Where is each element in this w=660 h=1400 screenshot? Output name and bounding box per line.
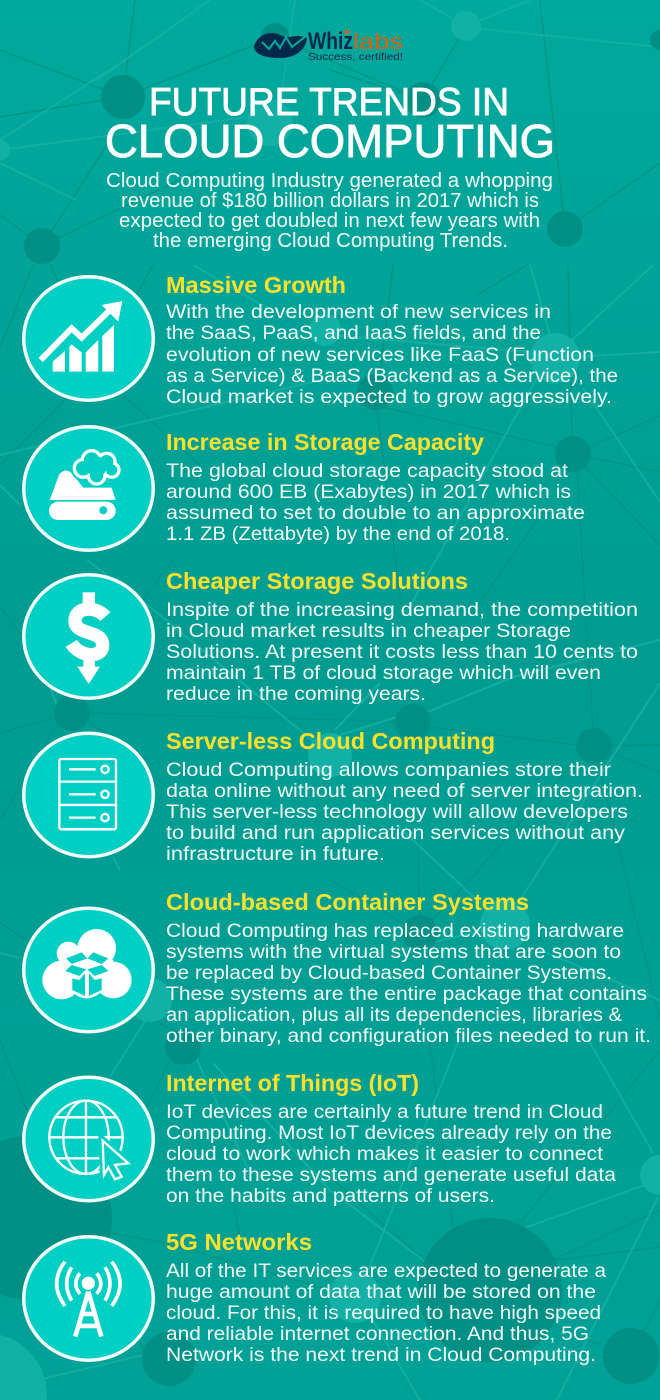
text block: data online without any need of server integration. bbox=[166, 780, 643, 802]
heading: 5G Networks bbox=[166, 1229, 312, 1255]
text block: in Cloud market results in cheaper Storage bbox=[166, 620, 571, 642]
logo mark bbox=[254, 33, 307, 58]
text block bbox=[166, 759, 643, 865]
text block: Solutions. At present it costs less than 10 cents to bbox=[166, 641, 638, 663]
text block: IoT devices are certainly a future trend in Cloud bbox=[166, 1101, 603, 1123]
intro text: Cloud Computing Industry generated a whopping bbox=[106, 170, 553, 192]
text block: other binary, and configuration files needed to run it. bbox=[166, 1025, 651, 1047]
text block: infrastructure in future. bbox=[166, 843, 385, 865]
text block: cloud to work which makes it easier to connect bbox=[166, 1143, 604, 1165]
heading: Cloud-based Container Systems bbox=[166, 889, 529, 915]
text block: All of the IT services are expected to generate a bbox=[166, 1260, 606, 1282]
heading: Massive Growth bbox=[166, 272, 346, 298]
title: CLOUD COMPUTING bbox=[105, 115, 555, 167]
icon: cloud storage drive bbox=[24, 427, 153, 550]
text block: the SaaS, PaaS, and IaaS fields, and the bbox=[166, 322, 541, 344]
text block: be replaced by Cloud-based Container Systems. bbox=[166, 962, 612, 984]
text block: around 600 EB (Exabytes) in 2017 which is bbox=[166, 481, 571, 503]
icon: cloud with box bbox=[24, 908, 153, 1032]
text block: assumed to set to double to an approximate bbox=[166, 502, 585, 524]
text block: an application, plus all its dependencies, libraries & bbox=[166, 1004, 622, 1026]
text block bbox=[166, 460, 585, 545]
text block bbox=[166, 301, 618, 408]
logo tagline: Success, certified! bbox=[308, 51, 403, 63]
text block: Cloud Computing allows companies store their bbox=[166, 759, 612, 781]
text block: and reliable internet connection. And thus, 5G bbox=[166, 1323, 589, 1345]
text block bbox=[166, 599, 638, 705]
text block: reduce in the coming years. bbox=[166, 683, 426, 705]
icon: globe with cursor bbox=[24, 1077, 153, 1201]
text block bbox=[166, 1101, 616, 1207]
icon: growth chart bbox=[24, 277, 153, 400]
text block: Cloud market is expected to grow aggressively. bbox=[166, 386, 612, 408]
heading: Internet of Things (IoT) bbox=[166, 1070, 419, 1096]
text block: With the development of new services in bbox=[166, 301, 551, 323]
text block: The global cloud storage capacity stood at bbox=[166, 460, 569, 482]
text block: Network is the next trend in Cloud Computing. bbox=[166, 1344, 596, 1366]
logo: Whizlabs bbox=[254, 28, 403, 63]
text block: systems with the virtual systems that are soon to bbox=[166, 941, 621, 963]
text block: This server-less technology will allow developers bbox=[166, 801, 628, 823]
panel: cheaper storage bbox=[24, 568, 638, 705]
title bbox=[105, 81, 555, 167]
text block: These systems are the entire package that contains bbox=[166, 983, 647, 1005]
text block: as a Service) & BaaS (Backend as a Service), the bbox=[166, 365, 618, 387]
panel: server-less bbox=[24, 728, 643, 865]
text block: to build and run application services without any bbox=[166, 822, 625, 844]
logo wordmark suffix: labs bbox=[353, 29, 403, 54]
heading: Increase in Storage Capacity bbox=[166, 429, 484, 455]
intro text: revenue of $180 billion dollars in 2017 which is bbox=[121, 190, 539, 212]
intro text: the emerging Cloud Computing Trends. bbox=[153, 230, 508, 252]
logo wordmark: Whiz bbox=[308, 28, 353, 55]
text block: evolution of new services like FaaS (Function bbox=[166, 344, 594, 366]
text block: cloud. For this, it is required to have high speed bbox=[166, 1302, 601, 1324]
icon: dollar with down arrow bbox=[24, 575, 153, 698]
text block: 1.1 ZB (Zettabyte) by the end of 2018. bbox=[166, 523, 510, 545]
heading: Server-less Cloud Computing bbox=[166, 728, 495, 754]
panel: storage capacity bbox=[24, 427, 585, 550]
panel: 5G networks bbox=[24, 1229, 606, 1366]
icon: signal tower bbox=[24, 1237, 153, 1360]
title: FUTURE TRENDS IN bbox=[149, 81, 509, 124]
intro text bbox=[106, 170, 553, 252]
text block: maintain 1 TB of cloud storage which will even bbox=[166, 662, 601, 684]
heading: Cheaper Storage Solutions bbox=[166, 568, 468, 594]
panel: internet of things bbox=[24, 1070, 616, 1207]
panel: massive growth bbox=[24, 272, 618, 408]
panel: container systems bbox=[24, 889, 651, 1047]
text block bbox=[166, 1260, 606, 1366]
logo i dot bbox=[345, 30, 349, 34]
text block: Cloud Computing has replaced existing hardware bbox=[166, 920, 624, 942]
text block: huge amount of data that will be stored on the bbox=[166, 1281, 596, 1303]
text block: them to these systems and generate useful data bbox=[166, 1164, 616, 1186]
intro text: expected to get doubled in next few years with bbox=[119, 210, 540, 232]
text block bbox=[166, 920, 651, 1047]
text block: Inspite of the increasing demand, the competition bbox=[166, 599, 638, 621]
text block: Computing. Most IoT devices already rely on the bbox=[166, 1122, 612, 1144]
icon: server rack bbox=[24, 733, 153, 857]
text block: on the habits and patterns of users. bbox=[166, 1185, 495, 1207]
